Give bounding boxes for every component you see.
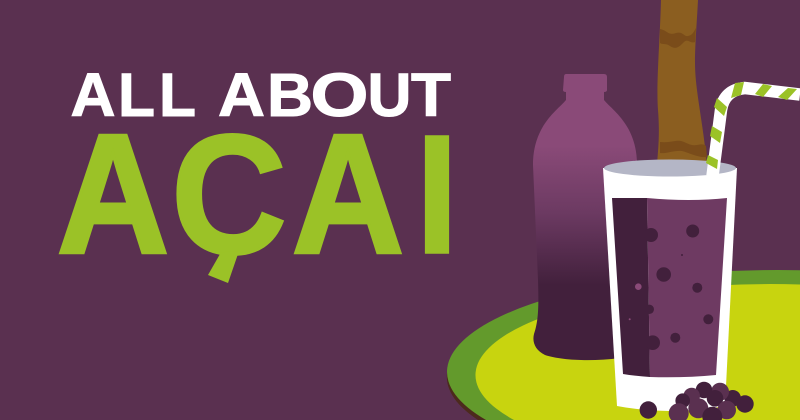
- tree trunk: [657, 0, 707, 165]
- plate: [447, 270, 800, 420]
- title: all about: A: [70, 61, 116, 129]
- title: açai: Ç: [171, 100, 287, 290]
- title: açai: A: [57, 100, 169, 290]
- title: all about: L: [118, 61, 155, 129]
- title: açai: I: [415, 100, 459, 290]
- juice dark: [612, 198, 650, 377]
- title: all about: [70, 61, 451, 129]
- acai berries: [640, 382, 754, 420]
- straw: [706, 82, 800, 176]
- title: all about: T: [411, 61, 451, 129]
- title: all about: U: [368, 61, 412, 129]
- title: all about: B: [267, 61, 313, 129]
- glass rim: [604, 160, 736, 176]
- title: all about: L: [159, 61, 196, 129]
- title: açai: A: [292, 100, 404, 290]
- bubbles: [629, 224, 713, 350]
- bottle: [533, 74, 637, 360]
- title: all about: A: [218, 61, 265, 129]
- title: all about: O: [310, 61, 368, 129]
- bottle cap: [563, 74, 607, 92]
- title: açai: [58, 133, 450, 283]
- juice light: [647, 198, 727, 377]
- glass: [603, 160, 737, 411]
